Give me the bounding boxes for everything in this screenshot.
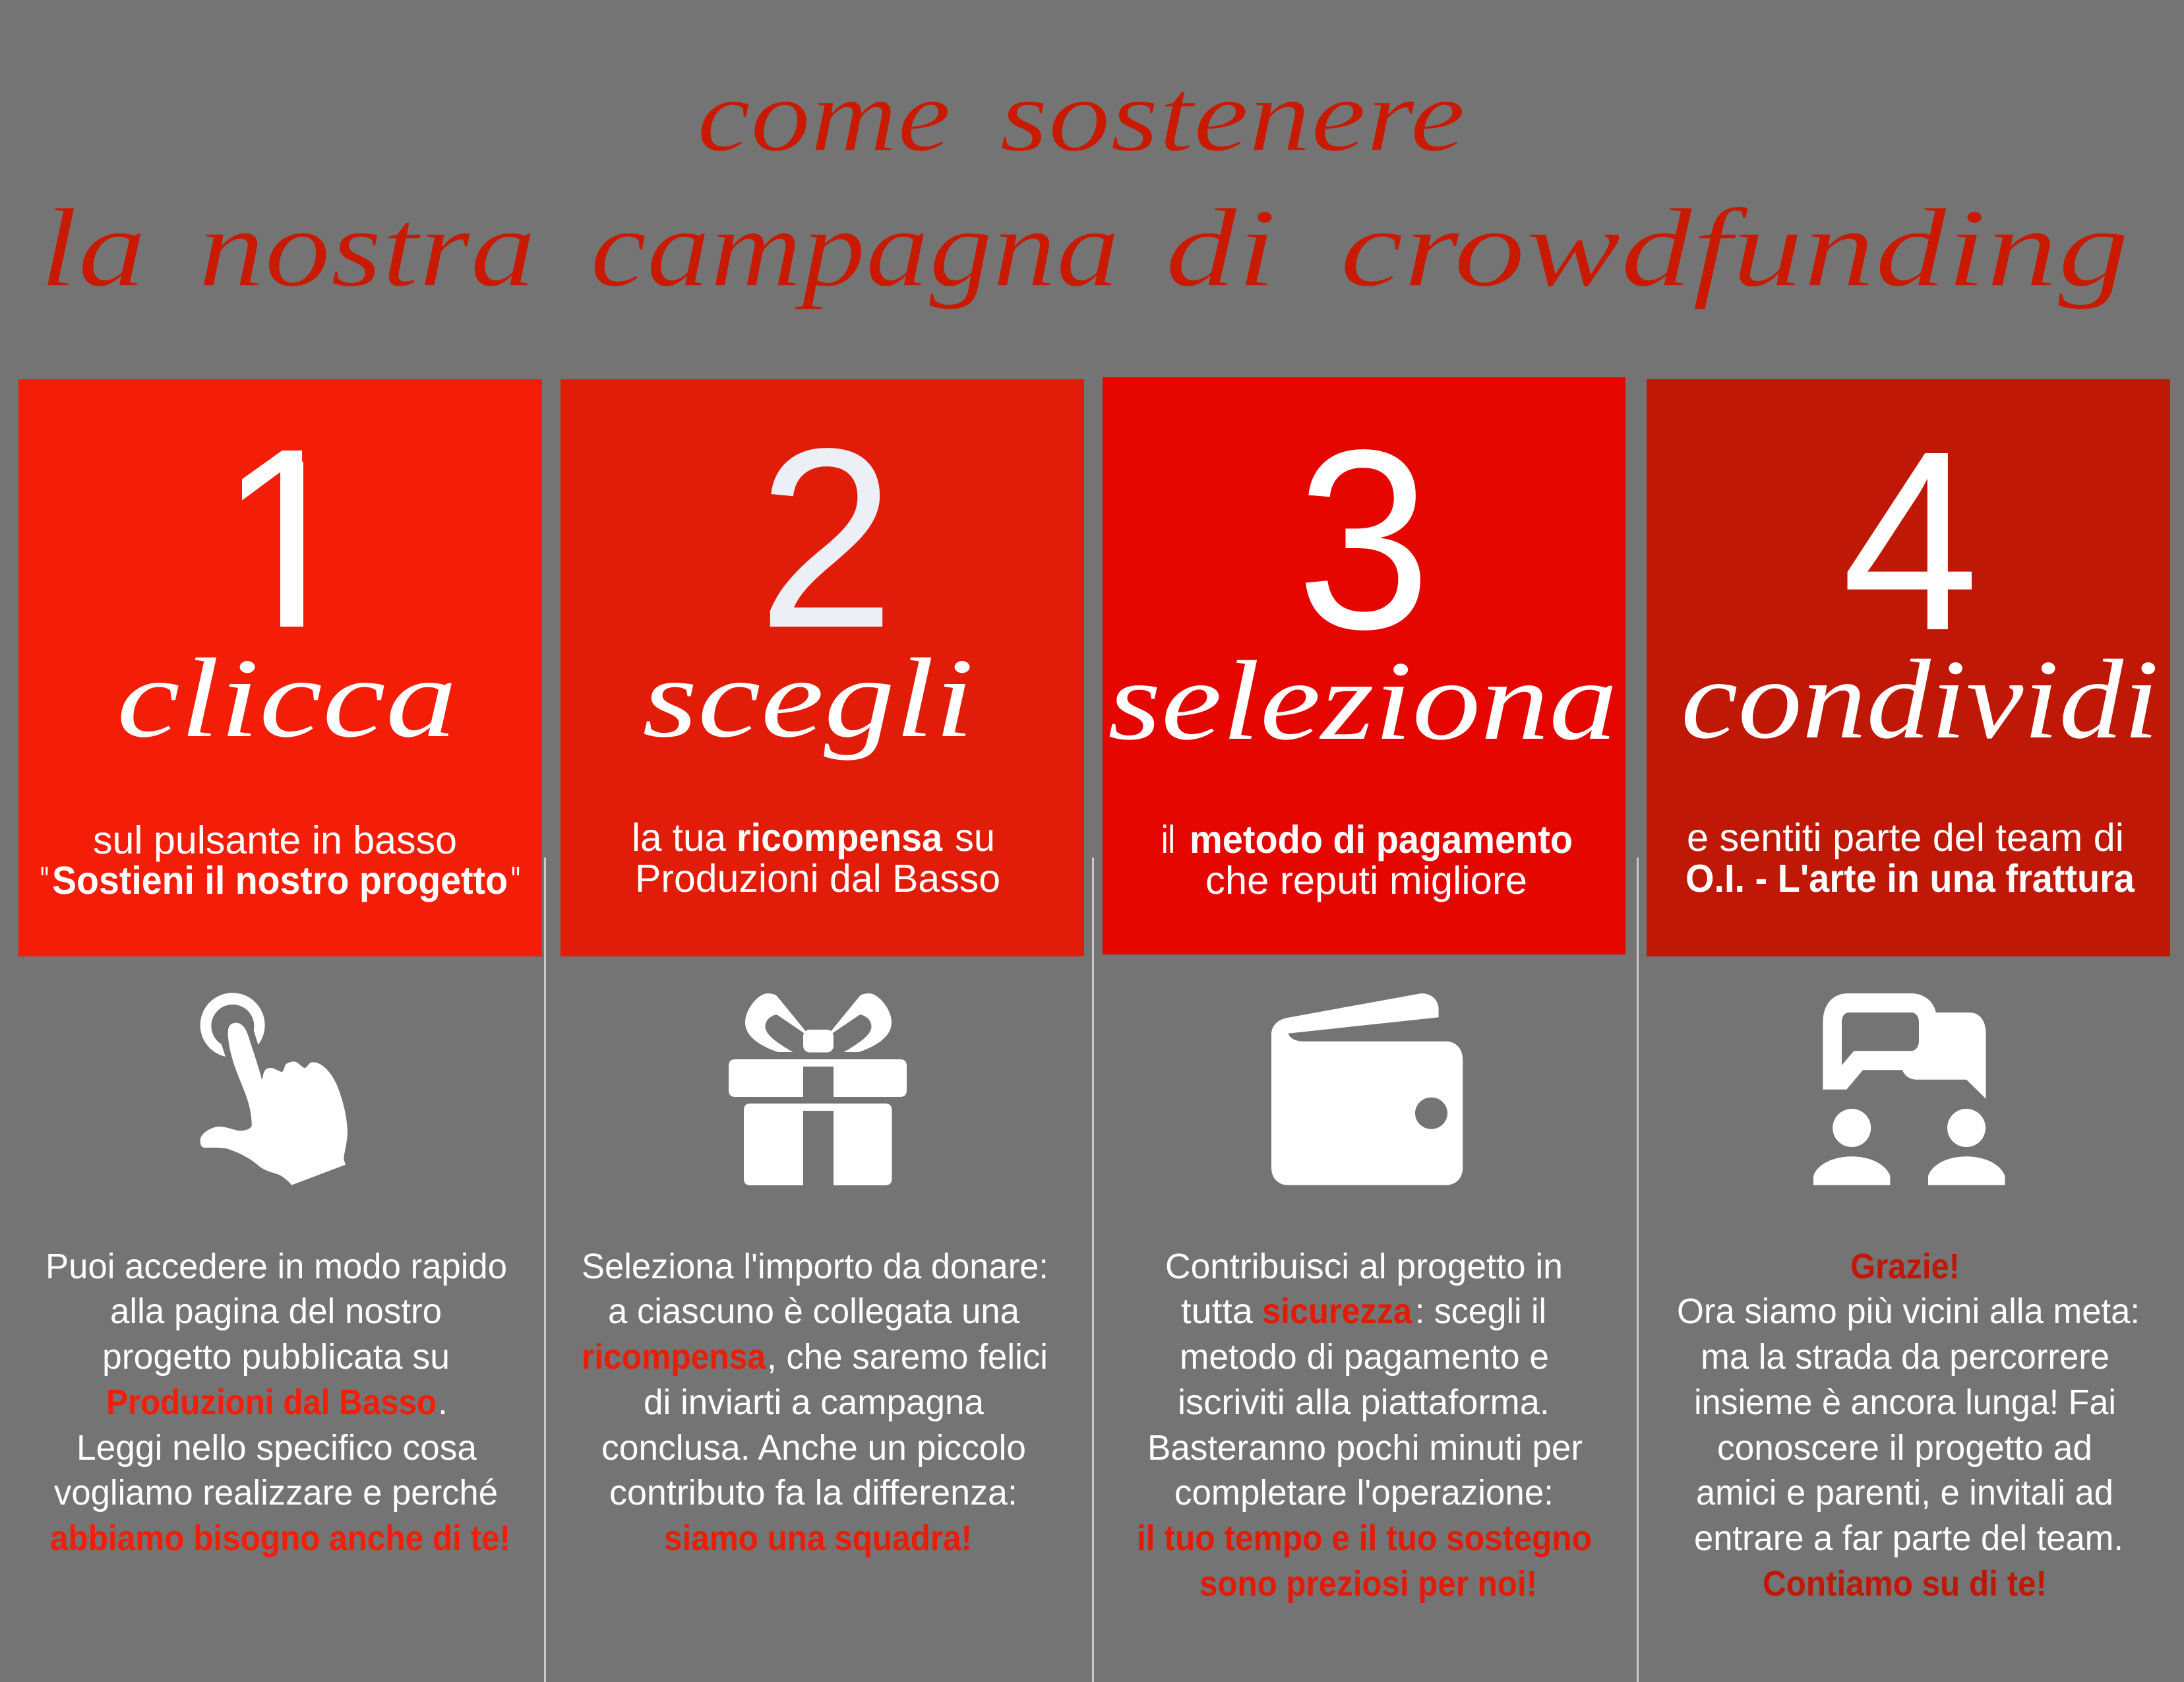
number 3: 3 xyxy=(1296,397,1431,683)
title: nostra xyxy=(198,186,536,310)
text block: column 3: Basteranno pochi minuti per xyxy=(1147,1428,1583,1468)
text block: column 4: ma la strada da percorrere xyxy=(1701,1337,2109,1377)
subtitle step 2: su xyxy=(955,816,995,859)
subtitle step 4 xyxy=(1685,816,2135,900)
title: sostenere xyxy=(1000,58,1465,173)
text block: column 4: Ora siamo più vicini alla meta: xyxy=(1677,1292,2140,1331)
icon: gift box xyxy=(729,993,907,1185)
text block: column 1: alla pagina del nostro xyxy=(110,1292,442,1331)
text block: column 2: contributo fa la differenza: xyxy=(609,1473,1017,1512)
text block: column 1: Leggi nello specifico cosa xyxy=(76,1428,477,1468)
number 4: 4 xyxy=(1842,398,1979,684)
subtitle step 4: O.I. - L'arte in una frattura xyxy=(1685,857,2135,900)
text block: column 1 xyxy=(46,1247,510,1558)
text block: column 1: Produzioni dal Basso xyxy=(106,1383,437,1422)
icon: wallet xyxy=(1271,993,1463,1185)
heading: seleziona: seleziona xyxy=(1108,639,1618,764)
subtitle step 3: il xyxy=(1161,818,1175,861)
subtitle step 2 xyxy=(632,816,1000,900)
subtitle step 3: metodo di pagamento xyxy=(1190,818,1573,861)
title: crowdfunding xyxy=(1340,186,2129,310)
text block: column 3: Contribuisci al progetto in xyxy=(1165,1247,1563,1286)
subtitle step 2: ricompensa xyxy=(737,816,943,859)
subtitle step 1: Sostieni il nostro progetto xyxy=(52,859,508,902)
subtitle step 3 xyxy=(1161,818,1573,902)
text block: column 4: amici e parenti, e invitali ad xyxy=(1696,1473,2113,1512)
title: come xyxy=(697,58,951,173)
number 1 xyxy=(241,451,303,627)
title: la xyxy=(40,186,146,310)
text block: column 2: ricompensa xyxy=(582,1337,766,1377)
icon: speech bubbles and two people xyxy=(1813,993,2005,1185)
text block: column 3 xyxy=(1137,1247,1592,1604)
text block: column 3: : scegli il xyxy=(1415,1292,1546,1331)
text block: column 3: metodo di pagamento e xyxy=(1180,1337,1549,1377)
text block: column 4: entrare a far parte del team. xyxy=(1694,1518,2123,1558)
heading: clicca: clicca xyxy=(117,636,457,761)
text block: column 1: vogliamo realizzare e perché xyxy=(54,1473,498,1512)
panel: step 4 condividi xyxy=(1647,379,2170,956)
text block: column 2: , che saremo felici xyxy=(767,1337,1048,1377)
title xyxy=(40,58,2129,310)
text block: column 1: abbiamo bisogno anche di te! xyxy=(50,1518,510,1558)
subtitle step 1 xyxy=(40,819,520,902)
heading: condividi: condividi xyxy=(1681,637,2159,763)
text block: column 4: Grazie! xyxy=(1850,1247,1960,1286)
panel: step 3 seleziona xyxy=(1103,377,1625,954)
number 2: 2 xyxy=(758,396,895,681)
text block: column 4 xyxy=(1677,1247,2140,1604)
text block: column 2: siamo una squadra! xyxy=(664,1518,972,1558)
text block: column 2: di inviarti a campagna xyxy=(644,1383,985,1422)
title: di xyxy=(1165,186,1277,310)
text block: column 2 xyxy=(582,1247,1048,1558)
subtitle step 2: Produzioni dal Basso xyxy=(635,857,1000,900)
text block: column 1: Puoi accedere in modo rapido xyxy=(46,1247,507,1286)
number 1: 1 xyxy=(218,396,355,681)
text block: column 3: sono preziosi per noi! xyxy=(1199,1564,1537,1604)
subtitle step 1: " xyxy=(511,859,520,902)
subtitle step 4: e sentiti parte del team di xyxy=(1687,816,2124,859)
text block: column 1: progetto pubblicata su xyxy=(102,1337,450,1377)
icon: pointing hand xyxy=(200,993,348,1185)
subtitle step 2: la tua xyxy=(632,816,726,859)
text block: column 3: sicurezza xyxy=(1262,1292,1412,1331)
text block: column 4: conoscere il progetto ad xyxy=(1717,1428,2092,1468)
text block: column 3: completare l'operazione: xyxy=(1174,1473,1554,1512)
text block: column 4: Contiamo su di te! xyxy=(1763,1564,2047,1604)
text block: column 3: iscriviti alla piattaforma. xyxy=(1178,1383,1550,1422)
text block: column 4: insieme è ancora lunga! Fai xyxy=(1694,1383,2116,1422)
text block: column 2: conclusa. Anche un piccolo xyxy=(601,1428,1026,1468)
subtitle step 3: che reputi migliore xyxy=(1205,859,1527,902)
panel: step 1 clicca xyxy=(18,379,542,956)
text block: column 3: il tuo tempo e il tuo sostegno xyxy=(1137,1518,1592,1558)
subtitle step 1: sul pulsante in basso xyxy=(93,819,457,862)
title: campagna xyxy=(590,186,1120,310)
text block: column 2: a ciascuno è collegata una xyxy=(608,1292,1020,1331)
text block: column 1: . xyxy=(438,1383,448,1422)
subtitle step 1: " xyxy=(40,859,49,902)
text block: column 2: Seleziona l'importo da donare: xyxy=(582,1247,1048,1286)
heading: scegli: scegli xyxy=(642,636,974,761)
text block: column 3: tutta xyxy=(1181,1292,1254,1331)
panel: step 2 scegli xyxy=(561,379,1084,956)
